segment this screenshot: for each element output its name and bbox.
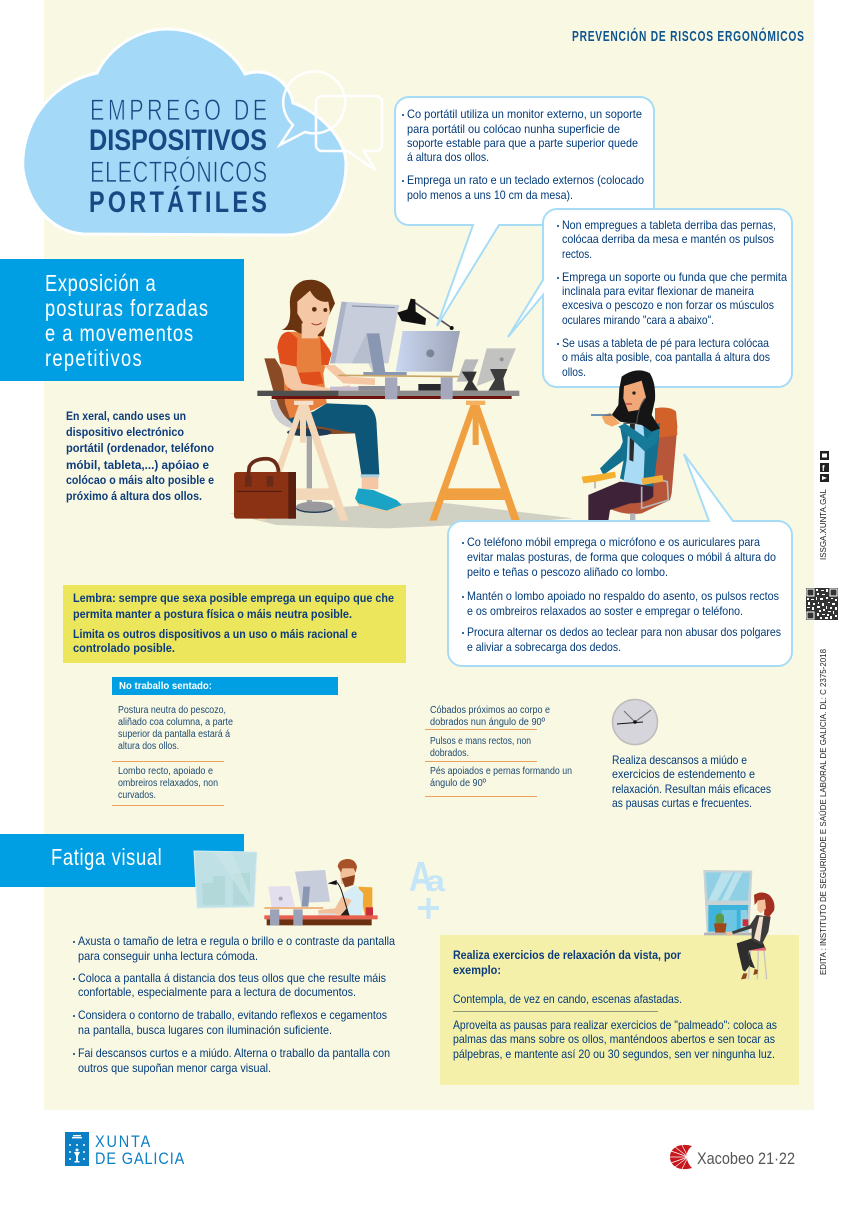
illustration: woman at desk <box>229 280 573 528</box>
title: DISPOSITIVOS <box>89 124 267 157</box>
visual fatigue tips: para conseguir unha lectura cómoda. <box>78 950 258 963</box>
edition credit vertical: EDITA : INSTITUTO DE SEGURIDADE E SAÚDE LABORAL DE GALICIA. DL: C 2375-2018 <box>818 649 828 975</box>
callout: eye relaxation: pálpebras, e mantente así 20 ou 30 segundos, sen ver ningunha luz. <box>453 1048 775 1061</box>
breaks text: exercicios de estendemento e <box>612 767 755 781</box>
section heading: posturas forzadas: posturas forzadas <box>45 296 208 322</box>
posture list: left: Postura neutra do pescozo, <box>118 705 226 716</box>
section heading: posturas forzadas: Exposición a <box>45 271 156 297</box>
bubble: tableta: Se usas a tableta de pé para lectura colócaa <box>562 337 769 350</box>
bubble: móbil: e aliviar a sobrecarga dos dedos. <box>467 641 621 654</box>
bubble: tableta: Emprega un soporte ou funda que che permita <box>562 271 788 284</box>
intro text: En xeral, cando uses un <box>66 411 186 423</box>
visual fatigue tips: outros que supoñan menor carga visual. <box>78 1062 271 1075</box>
sitting posture heading: No traballo sentado: <box>119 680 212 692</box>
posture list: right: Cóbados próximos ao corpo e <box>430 705 550 716</box>
bubble: móbil: Mantén o lombo apoiado no respaldo do asento, os pulsos rectos <box>467 590 779 603</box>
title <box>89 92 267 219</box>
logo: Xacobeo <box>670 1145 795 1169</box>
breaks text: relaxación. Resultan máis eficaces <box>612 782 771 796</box>
bubble: tableta: excesiva o pescozo e non forzar os músculos <box>562 299 774 312</box>
icons: social: f <box>822 464 825 473</box>
intro text: móbil, tableta,...) apóiao e <box>66 460 209 472</box>
bubble: portátil: polo menos a uns 10 cm da mesa). <box>407 189 573 202</box>
bubble: móbil: peito e teñas o pescozo aliñado co lombo. <box>467 566 668 579</box>
visual fatigue tips: Considera o contorno de traballo, evitando reflexos e cegamentos <box>78 1009 387 1022</box>
posture list: left: Lombo recto, apoiado e <box>118 766 213 777</box>
section heading: fatiga visual <box>0 834 244 887</box>
title cloud <box>23 29 382 235</box>
bubble: tableta: Non empregues a tableta derriba das pernas, <box>562 219 776 232</box>
posture list: right: Pés apoiados e pernas formando un <box>430 766 572 777</box>
header label: PREVENCIÓN DE RISCOS ERGONÓMICOS <box>572 27 804 45</box>
bubble: móbil: e os ombreiros relaxados ao soster e empregar o teléfono. <box>467 605 743 618</box>
bubble: portátil: Co portátil utiliza un monitor externo, un soporte <box>407 108 642 121</box>
bubble: tableta: o máis alta posible, coa pantalla á altura dos <box>562 351 770 364</box>
callout: lembra <box>63 585 406 663</box>
QR code <box>806 588 838 620</box>
section heading: posturas forzadas <box>0 259 244 381</box>
bubble: tableta: oculares mirando "cara a abaixo". <box>562 314 714 327</box>
bubble: tableta: colócaa derriba da mesa e mantén os pulsos <box>562 233 774 246</box>
callout: eye relaxation: Realiza exercicios de relaxación da vista, por <box>453 950 681 962</box>
breaks text: Realiza descansos a miúdo e <box>612 753 747 767</box>
bubble: tableta: ollos. <box>562 366 586 379</box>
visual fatigue tips <box>73 935 396 1075</box>
breaks text: as pausas curtas e frecuentes. <box>612 796 752 810</box>
icons: social <box>820 451 829 482</box>
bubble: móbil: Co teléfono móbil emprega o micrófono e os auriculares para <box>467 536 761 549</box>
posture list: right: Pulsos e mans rectos, non <box>430 736 531 747</box>
section heading: posturas forzadas: e a movementos <box>45 321 193 347</box>
intro text <box>66 411 214 503</box>
visual fatigue tips: confortable, especialmente para a lectura de documentos. <box>78 986 356 999</box>
bubble: tableta: inclinala para evitar flexionar de maneira <box>562 285 755 298</box>
bubble: móbil: Procura alternar os dedos ao teclear para non abusar dos polgares <box>467 626 781 639</box>
callout: lembra: permita manter a postura física o máis neutra posible. <box>73 609 352 621</box>
visual fatigue tips: Coloca a pantalla á distancia dos teus ollos que che resulte máis <box>78 972 386 985</box>
logo: Xunta de Galicia: DE GALICIA <box>95 1150 185 1168</box>
visual fatigue tips: na pantalla, busca lugares con iluminación suficiente. <box>78 1024 332 1037</box>
sitting posture heading <box>112 677 338 695</box>
logo: Xunta de Galicia: XUNTA <box>95 1133 151 1151</box>
title: ELECTRÓNICOS <box>90 154 267 189</box>
visual fatigue tips: Axusta o tamaño de letra e regula o brillo e o contraste da pantalla <box>78 935 396 948</box>
title: PORTÁTILES <box>89 184 267 219</box>
icon: text size: a <box>426 865 445 898</box>
callout: lembra: Lembra: sempre que sexa posible emprega un equipo que che <box>73 593 394 605</box>
section heading: fatiga visual: Fatiga visual <box>51 845 162 871</box>
bubble: tableta <box>508 209 792 387</box>
intro text: próximo á altura dos ollos. <box>66 491 202 503</box>
callout: eye relaxation: Contempla, de vez en cando, escenas afastadas. <box>453 993 682 1006</box>
posture list: right <box>425 705 572 796</box>
section heading: posturas forzadas: repetitivos <box>45 346 142 372</box>
callout: lembra: controlado posible. <box>73 643 175 655</box>
posture list: left: aliñado coa columna, a parte <box>118 717 233 728</box>
intro text: dispositivo electrónico <box>66 427 184 439</box>
callout: eye relaxation: palmas das mans sobre os ollos, manténdoos abertos e sen tocar as <box>453 1033 775 1046</box>
posture list: left: superior da pantalla estará á <box>118 729 230 740</box>
breaks text <box>612 753 771 810</box>
bubble: portátil: para portátil ou colócao nunha superficie de <box>407 123 620 136</box>
callout: eye relaxation: Aproveita as pausas para realizar exercicios de "palmeado": coloca as <box>453 1019 777 1032</box>
posture list: left: ombreiros relaxados, non <box>118 778 218 789</box>
title: EMPREGO DE <box>90 92 267 127</box>
illustration: woman at window <box>703 870 774 979</box>
bubble: portátil: Emprega un rato e un teclado externos (colocado <box>407 174 644 187</box>
bubble: portátil <box>395 97 654 326</box>
bubble: tableta: rectos. <box>562 248 592 261</box>
icon: clock <box>612 700 658 744</box>
illustration: translucent window <box>194 851 257 908</box>
website vertical: ISSGA.XUNTA.GAL <box>818 489 828 560</box>
bubble: móbil: evitar malas posturas, de forma que coloques o móbil á altura do <box>467 551 776 564</box>
posture list: right: dobrados. <box>430 748 469 759</box>
callout: eye relaxation <box>440 935 799 1085</box>
intro text: portátil (ordenador, teléfono <box>66 443 214 455</box>
intro text: colócao o máis alto posible e <box>66 475 214 487</box>
logo: Xunta de Galicia <box>65 1132 185 1168</box>
posture list: left <box>112 705 233 806</box>
bubble: portátil: á altura dos ollos. <box>407 151 489 164</box>
visual fatigue tips: Fai descansos curtos e a miúdo. Alterna o traballo da pantalla con <box>78 1047 390 1060</box>
illustration: woman with phone <box>582 370 677 521</box>
posture list: left: curvados. <box>118 790 156 801</box>
illustration: man at computer <box>264 859 378 925</box>
bubble: portátil: soporte estable para que a parte superior quede <box>407 137 638 150</box>
bubble: móbil <box>448 454 792 666</box>
posture list: left: altura dos ollos. <box>118 741 179 752</box>
logo: Xacobeo: Xacobeo 21·22 <box>697 1149 795 1168</box>
posture list: right: dobrados nun ángulo de 90º <box>430 717 545 728</box>
callout: lembra: Limita os outros dispositivos a un uso o máis racional e <box>73 629 357 641</box>
callout: eye relaxation: exemplo: <box>453 965 501 977</box>
icon: text size: A <box>409 853 433 900</box>
icon: text size <box>409 853 445 919</box>
posture list: right: ángulo de 90º <box>430 778 486 789</box>
